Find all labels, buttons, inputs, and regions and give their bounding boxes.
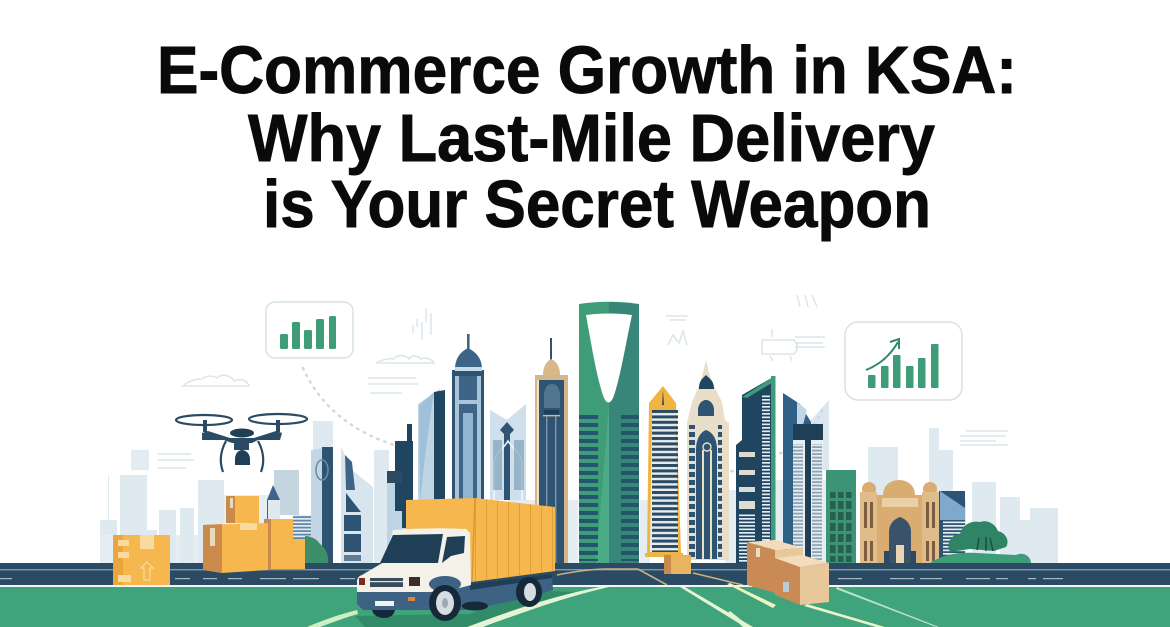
yellow tower [645,386,683,557]
pale background skyline [100,400,1058,563]
title: is Your Secret Weapon [263,167,931,242]
dotted connector lines [303,368,822,472]
pale ornate tower [490,404,526,500]
stacked parcels [203,496,328,573]
title [157,33,1017,242]
truck chassis [452,574,553,610]
title: Why Last-Mile Delivery [248,101,935,176]
tan parcels on road [747,540,829,605]
green ground with light trails [0,583,1170,627]
glass tower [418,389,445,500]
truck cargo box [406,498,555,582]
road band [0,563,1170,585]
truck front wheels [372,576,461,621]
small parcel on road [664,555,691,574]
small domed tower and window block behind parcels [267,485,312,539]
left parcel [113,535,170,585]
Kingdom Centre tower [579,302,639,563]
delivery drone [176,414,307,472]
faceted tower [341,447,373,563]
trees [930,521,1031,563]
delivery truck [357,498,555,621]
truck rear wheel [462,577,542,610]
small bar chart card [266,302,353,358]
small tower with emblem [311,447,333,563]
title: E-Commerce Growth in KSA: [157,33,1017,108]
tan clock tower [535,338,568,563]
sketch clouds and faint text lines [131,295,1008,470]
domed heritage palace [860,480,965,563]
truck cab [357,528,471,610]
green-edged tall tower [736,376,776,563]
ornate art deco tower [687,360,729,560]
domed tower [452,334,484,500]
stepped dark tower [387,424,413,563]
blue faceted tower with banded windows [783,393,823,563]
growth chart card [845,322,962,400]
green office block [826,470,856,563]
